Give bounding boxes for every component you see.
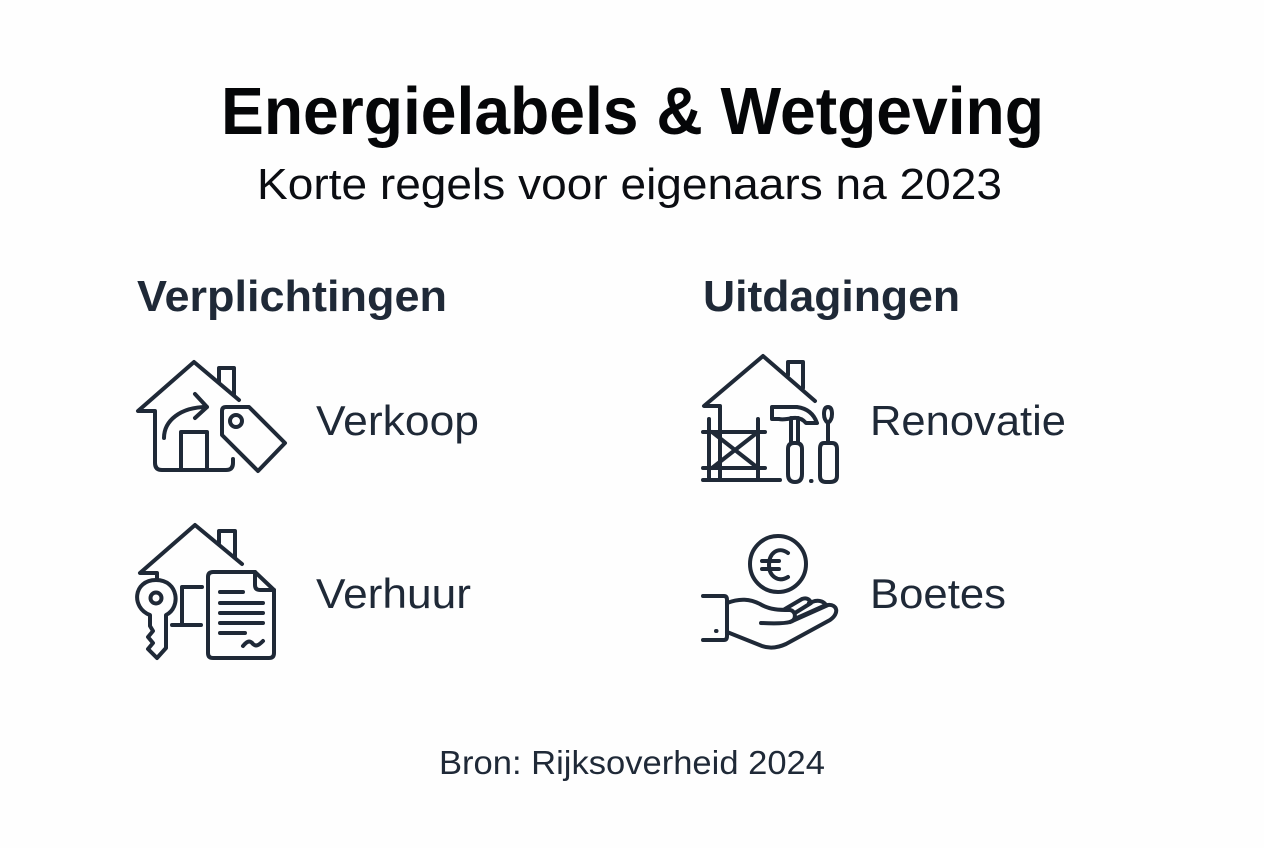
subtitle: Korte regels voor eigenaars na 2023 bbox=[257, 160, 1002, 209]
icon: house with price tag bbox=[138, 362, 285, 471]
icon: hand with euro coin bbox=[703, 536, 836, 648]
heading: uitdagingen: Uitdagingen bbox=[703, 272, 960, 321]
label: renovatie: Renovatie bbox=[870, 397, 1066, 444]
icon: house with scaffold and tools bbox=[703, 356, 837, 482]
label: verhuur: Verhuur bbox=[316, 570, 471, 617]
title: Energielabels & Wetgeving bbox=[221, 74, 1044, 149]
icon: house with key and contract bbox=[137, 525, 274, 658]
source note: Bron: Rijksoverheid 2024 bbox=[439, 744, 825, 781]
label: boetes: Boetes bbox=[870, 570, 1006, 617]
heading: verplichtingen: Verplichtingen bbox=[137, 272, 447, 321]
label: verkoop: Verkoop bbox=[316, 397, 479, 444]
panel: uitdagingen bbox=[703, 272, 1066, 648]
panel: verplichtingen bbox=[137, 272, 479, 658]
